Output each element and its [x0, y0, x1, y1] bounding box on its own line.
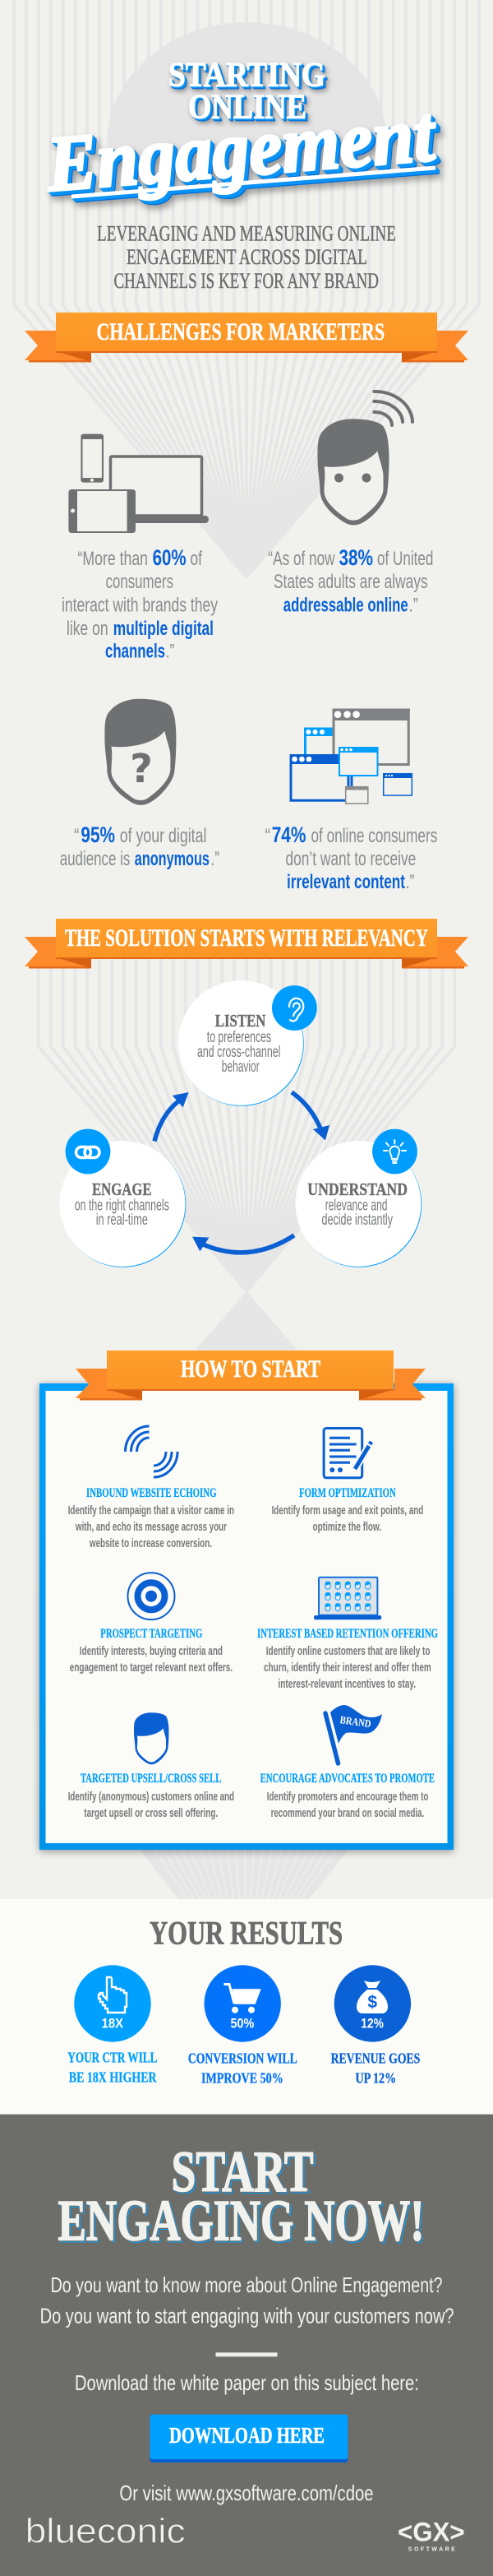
icon: shopping cart	[223, 1984, 261, 2013]
quote text: “As of now	[268, 548, 335, 570]
banner: the solution starts with relevancy	[25, 919, 468, 969]
item: inbound website echoing: with, and echo its message across your	[75, 1521, 227, 1534]
quote text: States adults are always	[274, 571, 427, 593]
logo: gx software: SOFTWARE	[408, 2546, 455, 2553]
circle: engage: ENGAGE	[92, 1179, 151, 1199]
heading: start engaging now: START	[171, 2140, 314, 2204]
quote text: .”	[406, 871, 414, 893]
stat: irrelevant content	[265, 709, 437, 893]
icon: chain link	[66, 1129, 110, 1174]
quote text: 95%	[81, 822, 115, 847]
subtitle: ENGAGEMENT ACROSS DIGITAL	[127, 244, 367, 269]
quote text: channels	[105, 640, 165, 663]
result: click through rate: 18X	[102, 2016, 124, 2032]
background dome	[107, 22, 386, 197]
circle: listen: behavior	[222, 1059, 260, 1076]
item: encourage advocates to promote	[260, 1705, 435, 1820]
background rays: top	[14, 0, 479, 577]
result: click through rate	[67, 1965, 157, 2086]
quote text: .”	[166, 640, 174, 663]
logo: gx software: <GX>	[398, 2518, 465, 2547]
icon: laptop with faces	[314, 1578, 381, 1619]
quote text: anonymous	[135, 848, 210, 870]
title: starting online	[168, 57, 325, 127]
quote text: “	[74, 825, 79, 847]
background rays: below panel	[138, 1846, 351, 1899]
item: form optimization	[272, 1428, 423, 1534]
banner: challenges for marketers: CHALLENGES FOR MARKETERS	[97, 318, 385, 345]
banner: how to start	[76, 1351, 426, 1400]
quote text: “More than	[77, 548, 148, 570]
section: call to action footer	[0, 2114, 493, 2576]
stat: anonymous audience	[60, 699, 219, 870]
quote text: of online consumers	[311, 825, 437, 847]
title: starting online: STARTING	[168, 57, 325, 95]
icon: brand flag	[325, 1705, 382, 1763]
arrow: listen to understand	[292, 1092, 329, 1140]
circle: listen: and cross-channel	[197, 1044, 280, 1061]
text: visit url: Or visit www.gxsoftware.com/cdoe	[119, 2481, 374, 2505]
quote text: audience is	[60, 848, 130, 870]
circle: listen	[178, 980, 317, 1106]
background rays: solution	[39, 954, 454, 1367]
result: revenue: REVENUE GOES	[331, 2050, 420, 2067]
button: download here	[150, 2415, 348, 2462]
item: inbound website echoing: website to increase conversion.	[89, 1537, 212, 1550]
result: conversion: IMPROVE 50%	[201, 2070, 283, 2087]
stat: multiple digital channels	[62, 434, 218, 663]
item: inbound website echoing: INBOUND WEBSITE ECHOING	[86, 1486, 217, 1500]
circle: listen: LISTEN	[215, 1011, 266, 1031]
item: prospect targeting: Identify interests, buying criteria and	[80, 1645, 223, 1658]
stat: always addressable online	[268, 391, 433, 617]
arrow: understand to engage	[192, 1235, 294, 1253]
circle: understand: decide instantly	[322, 1212, 393, 1229]
icon: light bulb	[372, 1129, 417, 1174]
quote text: of United	[377, 548, 433, 570]
item: inbound website echoing: Identify the campaign that a visitor came in	[68, 1504, 234, 1517]
button: download here: DOWNLOAD HERE	[169, 2423, 325, 2448]
result: conversion	[188, 1965, 297, 2087]
quote text: multiple digital	[113, 618, 214, 640]
icon: anonymous face	[104, 699, 176, 805]
title: engagement script: Engagement	[43, 89, 440, 208]
item: targeted upsell cross sell: TARGETED UPSELL/CROSS SELL	[81, 1772, 221, 1786]
item: form optimization: optimize the flow.	[312, 1521, 381, 1534]
circle: understand: relevance and	[325, 1197, 388, 1214]
item: targeted upsell cross sell: target upsell or cross sell offering.	[84, 1807, 218, 1820]
quote text: of	[191, 548, 202, 570]
icon: ear	[272, 985, 317, 1031]
banner: how to start: HOW TO START	[181, 1355, 320, 1383]
arrow: engage to listen	[154, 1092, 189, 1142]
quote text	[265, 822, 437, 893]
quote text: .”	[210, 848, 219, 870]
result: conversion: CONVERSION WILL	[188, 2050, 297, 2067]
icon: connected face with wifi	[317, 391, 412, 525]
result: conversion: 50%	[230, 2016, 254, 2032]
item: interest based retention offering: interest-relevant incentives to stay.	[278, 1678, 416, 1691]
item: targeted upsell cross sell	[68, 1712, 234, 1820]
item: prospect targeting: engagement to target relevant next offers.	[70, 1661, 233, 1675]
quote text: don’t want to receive	[286, 848, 416, 870]
icon: form and pencil	[324, 1428, 371, 1478]
section: your results	[0, 1899, 493, 2114]
quote text: 60%	[153, 545, 187, 570]
result: click through rate: YOUR CTR WILL	[67, 2050, 157, 2066]
result: revenue	[331, 1965, 420, 2087]
icon: hand cursor	[99, 1977, 127, 2013]
circle: understand: UNDERSTAND	[307, 1179, 408, 1199]
heading: your results: YOUR RESULTS	[150, 1914, 343, 1951]
item: form optimization: Identify form usage and exit points, and	[272, 1504, 423, 1517]
icon: money bag	[357, 1981, 388, 2013]
circle: understand	[296, 1129, 422, 1267]
result: revenue: 12%	[361, 2016, 384, 2032]
item: targeted upsell cross sell: Identify (anonymous) customers online and	[68, 1791, 234, 1804]
quote text: interact with brands they	[62, 594, 218, 617]
quote text	[60, 822, 219, 870]
result: revenue: UP 12%	[355, 2070, 396, 2087]
item: inbound website echoing	[68, 1426, 234, 1550]
icon: echo arcs	[125, 1426, 177, 1477]
quote text: of your digital	[120, 825, 206, 847]
logo: blueconic: blueconic	[25, 2512, 186, 2550]
quote text	[62, 545, 218, 663]
panel: how to start	[39, 1351, 454, 1850]
text: questions	[40, 2273, 454, 2328]
result: click through rate: BE 18X HIGHER	[69, 2069, 157, 2086]
item: prospect targeting: PROSPECT TARGETING	[100, 1627, 202, 1641]
icon: phone, laptop and tablet	[68, 434, 209, 533]
item: interest based retention offering	[257, 1578, 438, 1691]
quote text: 74%	[272, 822, 306, 847]
circle: engage: on the right channels	[75, 1197, 169, 1214]
quote text: addressable online	[283, 594, 408, 617]
circle: engage	[59, 1129, 186, 1267]
circle: engage: in real-time	[96, 1212, 148, 1229]
icon: browser windows	[289, 709, 412, 804]
quote text: 38%	[339, 545, 373, 570]
subtitle: CHANNELS IS KEY FOR ANY BRAND	[113, 268, 379, 293]
item: prospect targeting	[70, 1573, 233, 1675]
icon: money bag: $	[367, 1993, 377, 2012]
heading: start engaging now	[58, 2140, 424, 2253]
quote text: .”	[409, 594, 418, 617]
icon: brand flag: BRAND	[339, 1713, 372, 1730]
quote text: “	[265, 825, 270, 847]
banner: challenges for marketers	[25, 313, 468, 362]
quote text	[268, 545, 433, 617]
quote text: consumers	[106, 571, 173, 593]
circle: listen: to preferences	[207, 1029, 271, 1046]
subtitle	[97, 220, 396, 293]
title: starting online: ONLINE	[188, 89, 306, 127]
icon: blue face	[134, 1712, 168, 1764]
icon: anonymous face: ?	[130, 746, 153, 792]
item: form optimization: FORM OPTIMIZATION	[299, 1486, 396, 1500]
quote text: like on	[67, 618, 108, 640]
quote text: irrelevant content	[287, 871, 405, 893]
icon: target	[128, 1573, 174, 1619]
